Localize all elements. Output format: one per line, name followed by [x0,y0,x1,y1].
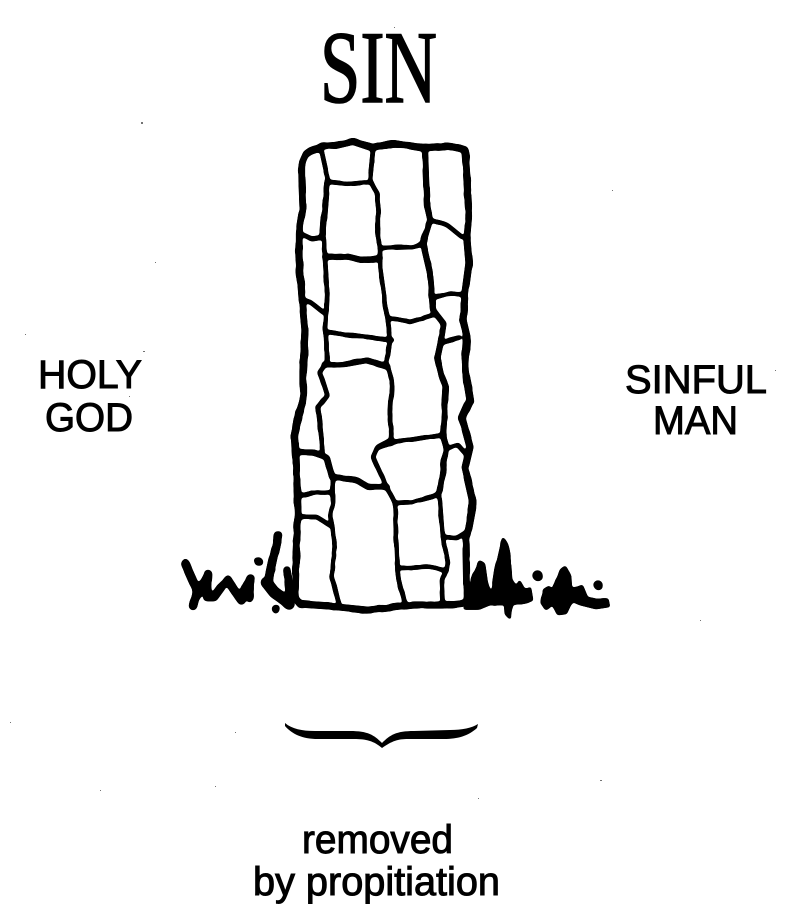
stone wall [295,141,473,610]
right grass [465,539,609,618]
label: sinful man: SINFUL [625,358,767,402]
label: holy God: GOD [45,396,133,440]
label: sinful man: MAN [653,399,738,443]
label: sinful man [625,358,767,443]
caption [253,818,500,904]
caption: removed [302,818,453,862]
stone joints [298,150,465,603]
brace [285,723,478,748]
left grass [185,535,290,613]
caption: by propitiation [253,860,500,904]
label: holy God: HOLY [38,353,142,397]
title: SIN [320,11,437,125]
heavy joints [297,150,446,493]
label: holy God [38,353,142,440]
wall outline [295,141,473,610]
